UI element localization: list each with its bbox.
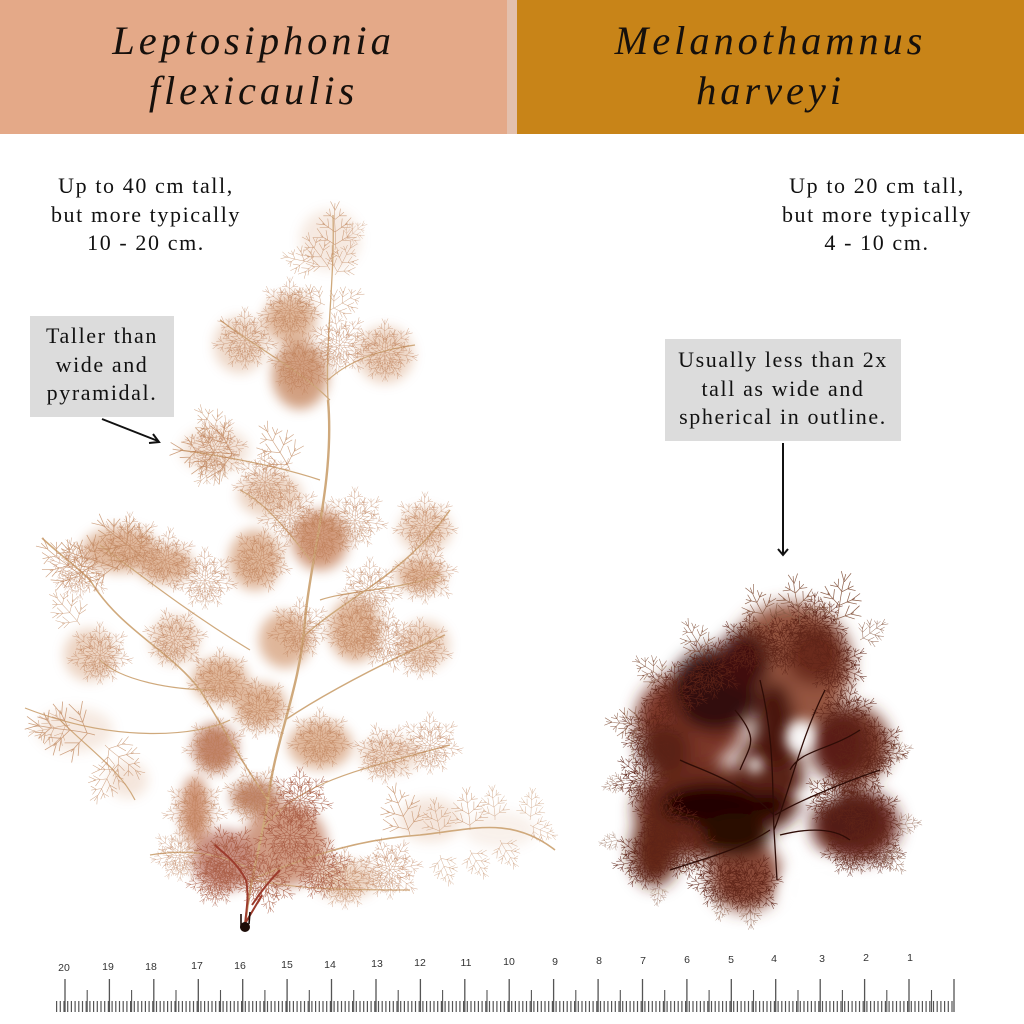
ruler numbers: 15 xyxy=(281,959,293,971)
text: left plant size: 10 - 20 cm. xyxy=(87,230,205,255)
header divider xyxy=(507,0,517,134)
callout: right plant shape xyxy=(665,339,901,441)
ruler xyxy=(56,952,954,1012)
arrow: to left plant xyxy=(102,419,159,443)
seaweed: Melanothamnus harveyi xyxy=(597,567,923,931)
ruler ticks xyxy=(56,979,954,1012)
callout: left plant shape: Taller than xyxy=(46,323,158,348)
text: left plant size: but more typically xyxy=(51,202,241,226)
callout: right plant shape: Usually less than 2x xyxy=(678,347,888,372)
ruler numbers: 12 xyxy=(414,957,426,969)
ruler numbers: 16 xyxy=(234,960,246,972)
callout: right plant shape: tall as wide and xyxy=(701,376,865,400)
ruler numbers: 14 xyxy=(324,959,336,971)
ruler numbers xyxy=(58,952,913,974)
ruler numbers: 3 xyxy=(819,953,825,965)
ruler numbers: 4 xyxy=(771,953,777,965)
ruler numbers: 5 xyxy=(728,954,734,966)
callout: left plant shape xyxy=(30,316,174,417)
ruler numbers: 7 xyxy=(640,955,646,967)
header: Leptosiphonia flexicaulis: Leptosiphonia xyxy=(112,18,395,63)
ruler numbers: 9 xyxy=(552,956,558,968)
header: Melanothamnus harveyi xyxy=(517,0,1024,134)
header: Leptosiphonia flexicaulis xyxy=(0,0,507,134)
ruler numbers: 1 xyxy=(907,952,913,964)
outer fringe fronds xyxy=(597,567,923,930)
text: right plant size: Up to 20 cm tall, xyxy=(789,173,965,198)
ruler numbers: 19 xyxy=(102,961,114,973)
ruler numbers: 20 xyxy=(58,962,70,974)
callout: left plant shape: wide and xyxy=(56,352,148,376)
callout: left plant shape: pyramidal. xyxy=(47,380,157,405)
seaweed: Leptosiphonia flexicaulis xyxy=(20,201,562,932)
ruler numbers: 2 xyxy=(863,952,869,964)
ruler numbers: 11 xyxy=(461,957,472,969)
text: left plant size: Up to 40 cm tall, xyxy=(58,173,234,198)
arrow: to right plant xyxy=(778,443,788,555)
text: left plant size xyxy=(51,173,241,255)
ruler numbers: 6 xyxy=(684,954,690,966)
gaps in thallus xyxy=(747,721,862,922)
ruler numbers: 10 xyxy=(503,956,515,968)
header: Melanothamnus harveyi: Melanothamnus xyxy=(615,18,926,63)
header: Melanothamnus harveyi: harveyi xyxy=(696,68,845,113)
text: right plant size: 4 - 10 cm. xyxy=(824,230,930,255)
ruler numbers: 17 xyxy=(191,960,203,972)
ruler numbers: 18 xyxy=(145,961,157,973)
text: right plant size: but more typically xyxy=(782,202,972,226)
text: right plant size xyxy=(782,173,972,255)
header: Leptosiphonia flexicaulis: flexicaulis xyxy=(149,68,358,113)
ruler numbers: 8 xyxy=(596,955,602,967)
ruler numbers: 13 xyxy=(371,958,383,970)
callout: right plant shape: spherical in outline. xyxy=(679,404,887,429)
